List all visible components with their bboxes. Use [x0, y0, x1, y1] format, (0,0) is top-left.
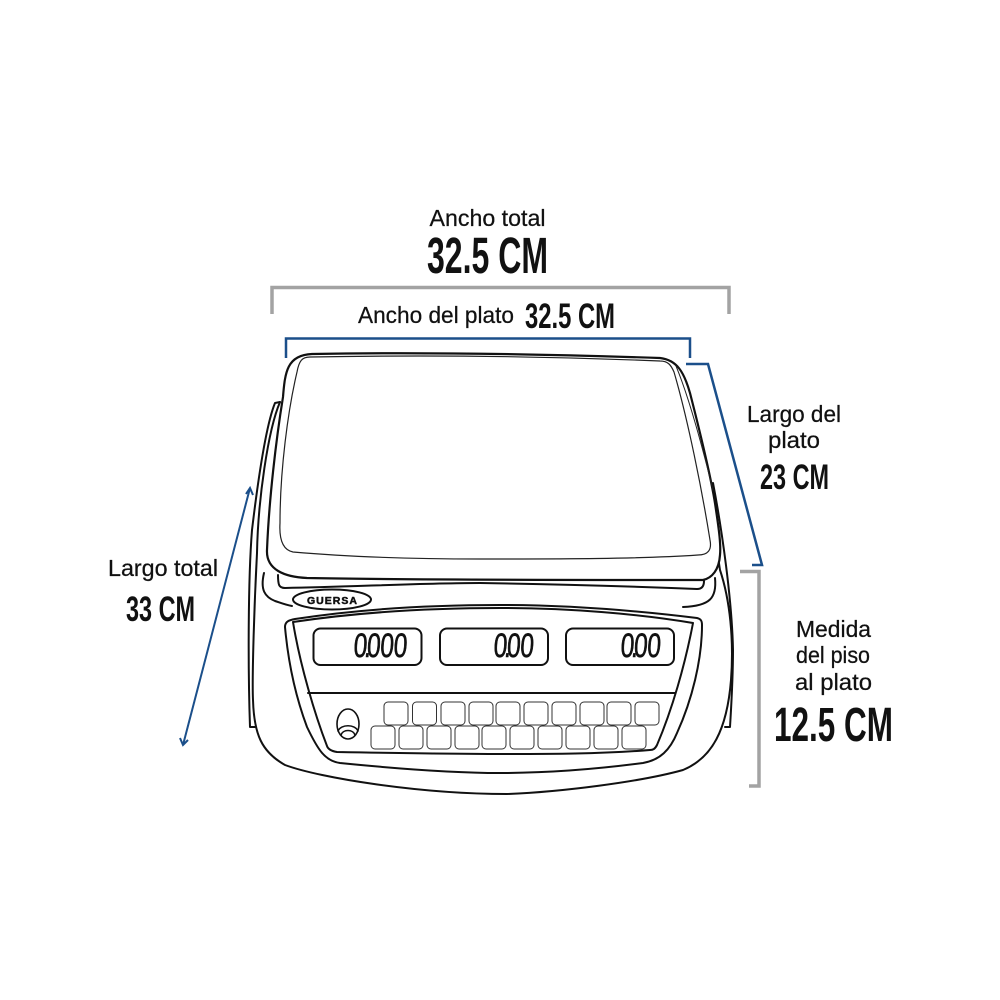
label: floor to plate height: 12.5 CM — [774, 699, 893, 752]
keypad — [371, 702, 659, 749]
scale illustration — [249, 353, 733, 794]
label: total length — [108, 555, 218, 629]
label: plate length — [747, 401, 841, 497]
label: floor to plate height: Medida — [796, 616, 871, 642]
label: plate length: 23 CM — [760, 458, 829, 497]
bracket: total width — [272, 288, 729, 314]
label: plate width: Ancho del plato — [358, 302, 514, 328]
logo: GUERSA — [293, 590, 371, 610]
label: floor to plate height: al plato — [795, 669, 872, 695]
label: total width: 32.5 CM — [427, 227, 548, 284]
label: total length: Largo total — [108, 555, 218, 581]
scale body — [249, 402, 733, 794]
label: total length: 33 CM — [126, 590, 195, 629]
control panel — [285, 605, 702, 773]
price display — [440, 627, 548, 665]
label: total width — [427, 205, 548, 284]
bracket: plate width — [286, 338, 690, 358]
power knob — [337, 709, 359, 739]
weight display — [314, 627, 422, 665]
label: total width: Ancho total — [430, 205, 546, 231]
total display: 0.00 — [619, 627, 662, 665]
label: plate width — [358, 297, 615, 336]
weighing plate — [267, 353, 720, 589]
label: plate length: plato — [768, 427, 820, 453]
bracket: floor to plate — [740, 572, 759, 786]
label: plate length: Largo del — [747, 401, 841, 427]
total display — [566, 627, 674, 665]
label: plate width: 32.5 CM — [525, 297, 615, 336]
arrow: total length — [180, 488, 253, 745]
side curves — [263, 573, 292, 606]
label: floor to plate height — [774, 616, 893, 752]
price display: 0.00 — [492, 627, 535, 665]
bracket: plate length — [686, 364, 762, 565]
logo: GUERSA: GUERSA — [307, 595, 357, 607]
label: floor to plate height: del piso — [796, 642, 870, 668]
weight display: 0.000 — [352, 627, 409, 665]
